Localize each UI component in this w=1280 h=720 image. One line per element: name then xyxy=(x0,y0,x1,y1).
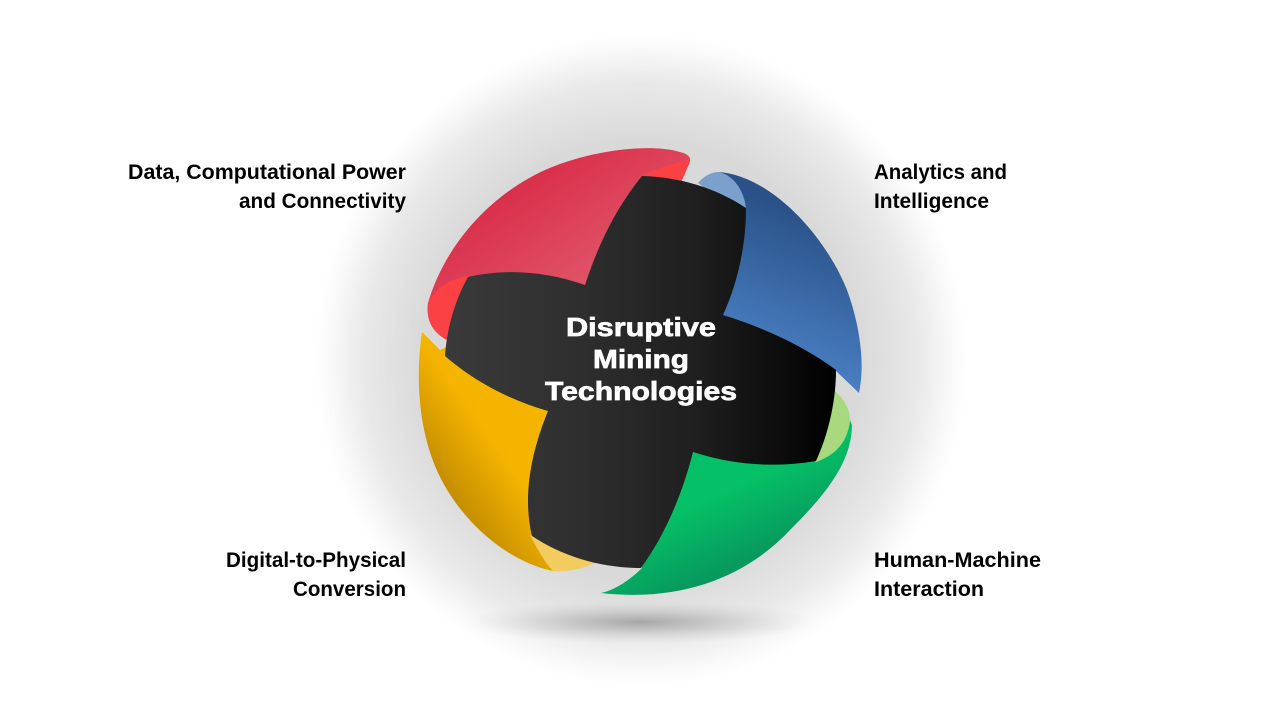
panel: blue segment xyxy=(698,172,862,393)
label: digital-to-physical conversion xyxy=(226,549,406,601)
panel: green segment xyxy=(601,391,852,595)
center title: Mining xyxy=(593,344,689,374)
panel: yellow segment xyxy=(419,332,595,571)
panel: central dark cross xyxy=(445,176,836,568)
panel: red segment xyxy=(428,148,690,340)
label: analytics and intelligence xyxy=(874,161,1007,213)
label: data, computational power and connectivity: Data, Computational Power xyxy=(128,161,406,184)
label: data, computational power and connectivity: and Connectivity xyxy=(239,190,406,213)
center title xyxy=(545,312,737,406)
ground shadow xyxy=(465,600,815,644)
label: human-machine interaction: Interaction xyxy=(874,578,984,601)
label: data, computational power and connectivity xyxy=(128,161,406,213)
label: human-machine interaction xyxy=(874,549,1041,601)
center title: Disruptive xyxy=(566,312,716,342)
label: digital-to-physical conversion: Conversion xyxy=(293,578,406,601)
globe graphic xyxy=(419,148,862,595)
background glow xyxy=(314,33,968,687)
label: analytics and intelligence: Analytics and xyxy=(874,161,1007,184)
label: analytics and intelligence: Intelligence xyxy=(874,190,989,213)
center title: Technologies xyxy=(545,376,737,406)
label: human-machine interaction: Human-Machine xyxy=(874,549,1041,572)
label: digital-to-physical conversion: Digital-to-Physical xyxy=(226,549,406,572)
